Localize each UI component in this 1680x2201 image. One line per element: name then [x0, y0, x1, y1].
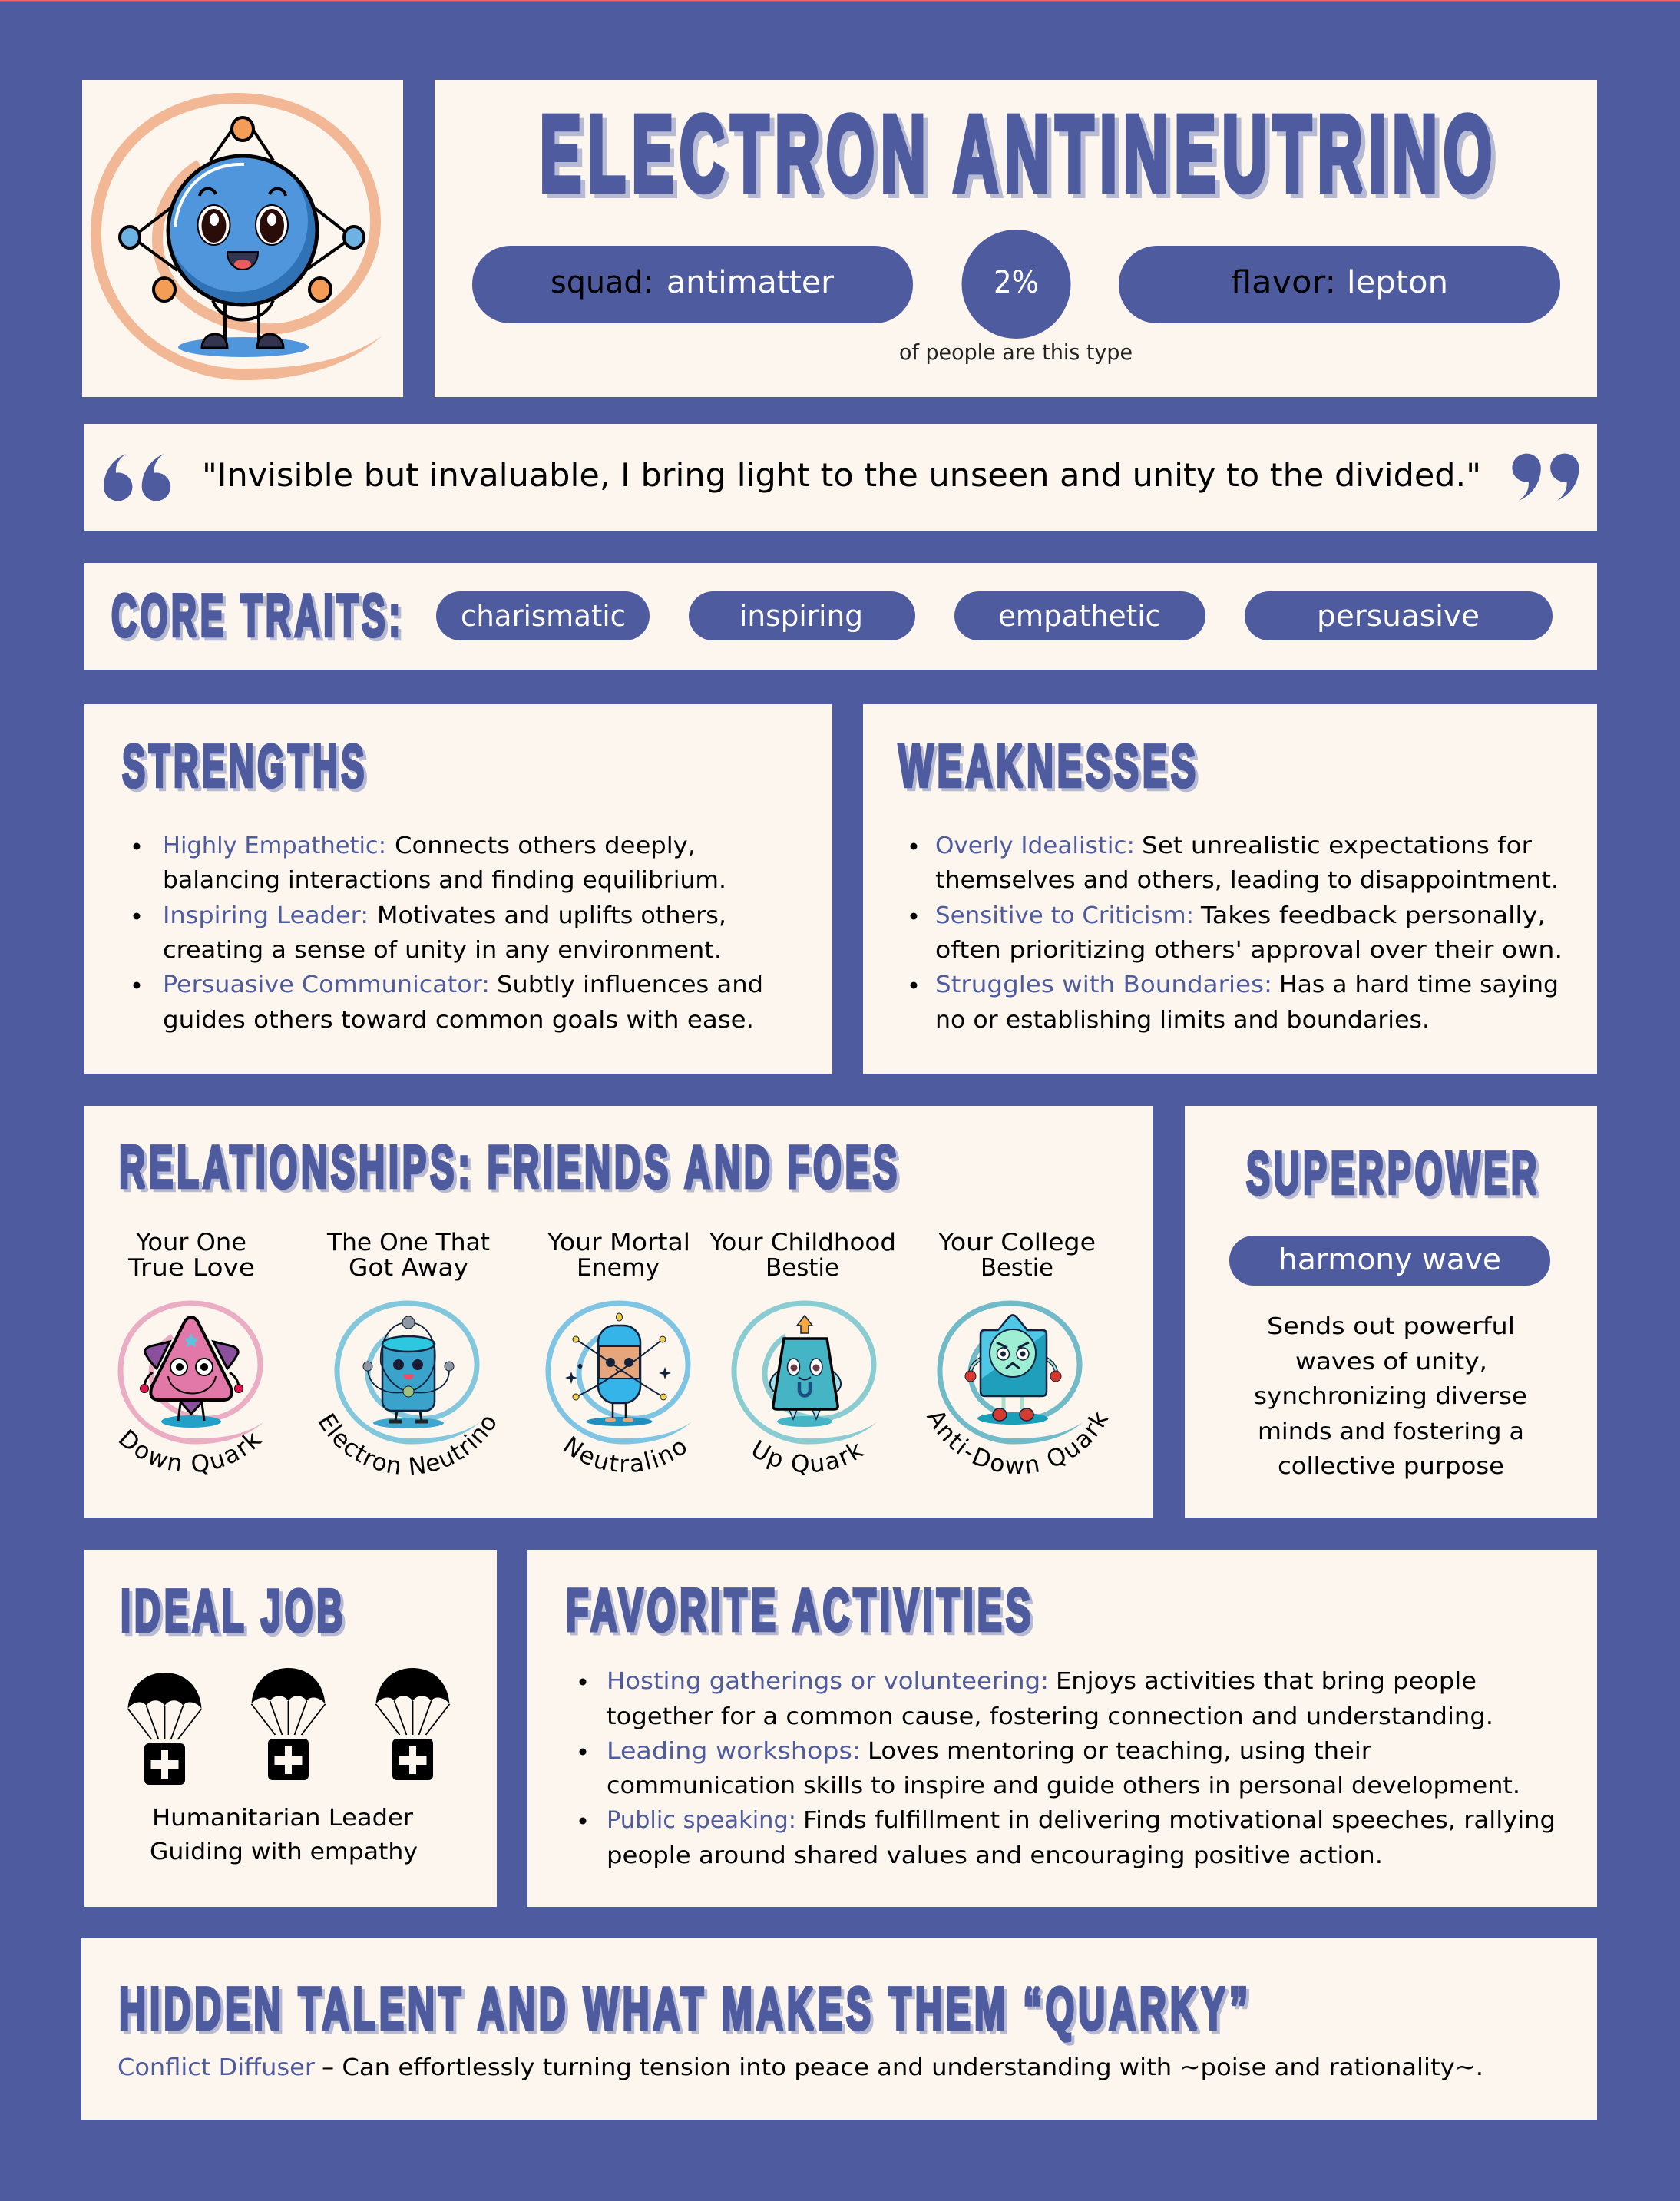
bullet list: activities: Loves mentoring or teaching, using their [868, 1738, 1372, 1765]
relationship: anti-down quark [926, 1229, 1109, 1474]
ideal job text [150, 1805, 418, 1865]
bullet list: weaknesses: often prioritizing others' approval over their own. [935, 937, 1563, 964]
relationship: neutralino: Enemy [577, 1254, 660, 1282]
pill: charismatic: charismatic [461, 599, 626, 633]
bullet list: strengths: balancing interactions and finding equilibrium. [163, 867, 726, 894]
stat: percent of people: 2% [994, 265, 1039, 300]
bullet list: activities: Hosting gatherings or volunteering: [607, 1668, 1049, 1695]
relationship: anti-down quark: Bestie [981, 1254, 1053, 1282]
heading: weaknesses: WEAKNESSES [898, 732, 1199, 799]
bullet list: weaknesses: themselves and others, leading to disappointment. [935, 867, 1559, 894]
pill: harmony wave [1229, 1236, 1550, 1286]
bullet list: weaknesses: Struggles with Boundaries: [935, 971, 1272, 998]
icon: parachute aid drop 2 [252, 1668, 326, 1780]
bullet list: activities: communication skills to inspire and guide others in personal development. [607, 1772, 1520, 1799]
pill: empathetic [954, 591, 1205, 640]
heading: strengths: STRENGTHS [122, 732, 368, 799]
stat: percent of people [899, 230, 1133, 365]
pill: inspiring [689, 591, 915, 640]
icon: parachute aid drop 1 [127, 1673, 201, 1785]
relationship: up quark: Your Childhood [709, 1229, 896, 1256]
pill: squad: antimatter [666, 265, 835, 300]
panel: hidden talent [81, 1938, 1597, 2120]
bullet list: activities: Leading workshops: [607, 1738, 861, 1765]
pill: persuasive: persuasive [1317, 599, 1480, 633]
quote text: "Invisible but invaluable, I bring light to the unseen and unity to the divided." [202, 456, 1481, 494]
heading: core traits: CORE TRAITS: [111, 581, 404, 649]
relationship: electron neutrino: Electron Neutrino [318, 1413, 495, 1475]
bullet list: weaknesses: no or establishing limits and boundaries. [935, 1007, 1430, 1034]
bullet list: weaknesses: Overly Idealistic: [935, 832, 1135, 859]
pill: flavor: flavor: [1231, 265, 1336, 300]
bullet list: strengths: Persuasive Communicator: [163, 971, 490, 998]
icon: electron antineutrino mascot [91, 98, 382, 380]
bullet list: strengths: creating a sense of unity in any environment. [163, 937, 722, 964]
bullet list: weaknesses [911, 832, 1563, 1034]
panel: avatar [82, 80, 403, 397]
bullet list: activities [579, 1668, 1556, 1869]
superpower description: minds and fostering a [1258, 1418, 1524, 1445]
bullet list: weaknesses: Set unrealistic expectations for [1142, 832, 1533, 859]
stat: percent of people: of people are this type [899, 339, 1133, 365]
pill: inspiring: inspiring [739, 599, 863, 633]
relationship: neutralino: Neutralino [564, 1436, 686, 1472]
pill: squad [472, 246, 913, 323]
bullet list: weaknesses: Takes feedback personally, [1200, 902, 1546, 929]
panel: core traits [84, 563, 1597, 670]
icon: opening quote mark [104, 454, 170, 501]
relationship: anti-down quark: Your College [938, 1229, 1096, 1256]
superpower description [1254, 1313, 1527, 1480]
pill: charismatic [436, 591, 650, 640]
panel: relationships [84, 1106, 1153, 1518]
relationship: down quark: Down Quark [118, 1429, 263, 1475]
bullet list: weaknesses: Has a hard time saying [1279, 971, 1559, 998]
bullet list: strengths [134, 832, 763, 1034]
relationship: up quark: Up Quark [752, 1439, 865, 1476]
heading: relationships: RELATIONSHIPS: FRIENDS AND FOES [119, 1133, 901, 1200]
bullet list: activities: together for a common cause, fostering connection and understanding. [607, 1703, 1493, 1730]
relationship: anti-down quark: Anti-Down Quark [926, 1412, 1109, 1474]
bullet list: strengths: Connects others deeply, [395, 832, 696, 859]
panel: ideal job [84, 1550, 497, 1907]
superpower description: collective purpose [1278, 1453, 1504, 1480]
icon: closing quote mark [1512, 454, 1579, 501]
hidden talent description: – Can effortlessly turning tension into peace and understanding with ~poise and rationality~. [322, 2054, 1483, 2081]
panel: favorite activities [527, 1550, 1597, 1907]
hidden talent description: Conflict Diffuser [117, 2054, 316, 2081]
icon: parachute aid drop 3 [376, 1668, 450, 1780]
bullet list: activities: Public speaking: [607, 1807, 796, 1834]
pill: flavor [1119, 246, 1560, 323]
panel: strengths [84, 704, 832, 1074]
pill: empathetic: empathetic [998, 599, 1161, 633]
ideal job text: Humanitarian Leader [152, 1805, 414, 1832]
relationship: up quark: Bestie [766, 1254, 839, 1282]
ideal job text: Guiding with empathy [150, 1839, 418, 1865]
pill: squad: squad: [551, 265, 653, 300]
bullet list: activities: Enjoys activities that bring people [1056, 1668, 1477, 1695]
relationship: down quark: True Love [127, 1254, 255, 1282]
bullet list: strengths: Highly Empathetic: [163, 832, 386, 859]
relationship: electron neutrino: The One That [326, 1229, 490, 1256]
bullet list: strengths: guides others toward common goals with ease. [163, 1007, 754, 1034]
relationship: up quark [709, 1229, 896, 1476]
relationship: neutralino: Your Mortal [547, 1229, 690, 1256]
relationship: neutralino [545, 1229, 691, 1472]
heading: favorite activities: FAVORITE ACTIVITIES [566, 1576, 1034, 1643]
panel: title header [435, 80, 1597, 397]
relationship: electron neutrino: Got Away [349, 1254, 468, 1282]
panel: superpower [1185, 1106, 1597, 1518]
panel: quote [84, 424, 1597, 531]
bullet list: activities: people around shared values and encouraging positive action. [607, 1842, 1383, 1869]
superpower description: Sends out powerful [1267, 1313, 1515, 1340]
bullet list: strengths: Motivates and uplifts others, [377, 902, 726, 929]
superpower description: waves of unity, [1295, 1349, 1487, 1375]
panel: weaknesses [863, 704, 1597, 1074]
pill: flavor: lepton [1347, 265, 1448, 300]
relationship: down quark [118, 1229, 263, 1475]
relationship: electron neutrino [318, 1229, 495, 1475]
pill: harmony wave: harmony wave [1278, 1243, 1501, 1276]
bullet list: strengths: Inspiring Leader: [163, 902, 369, 929]
pill: persuasive [1245, 591, 1553, 640]
bullet list: strengths: Subtly influences and [497, 971, 763, 998]
heading: ideal job: IDEAL JOB [121, 1577, 346, 1644]
bullet list: activities: Finds fulfillment in delivering motivational speeches, rallying [803, 1807, 1556, 1834]
bullet list: weaknesses: Sensitive to Criticism: [935, 902, 1194, 929]
relationship: down quark: Your One [135, 1229, 246, 1256]
superpower description: synchronizing diverse [1254, 1383, 1527, 1410]
